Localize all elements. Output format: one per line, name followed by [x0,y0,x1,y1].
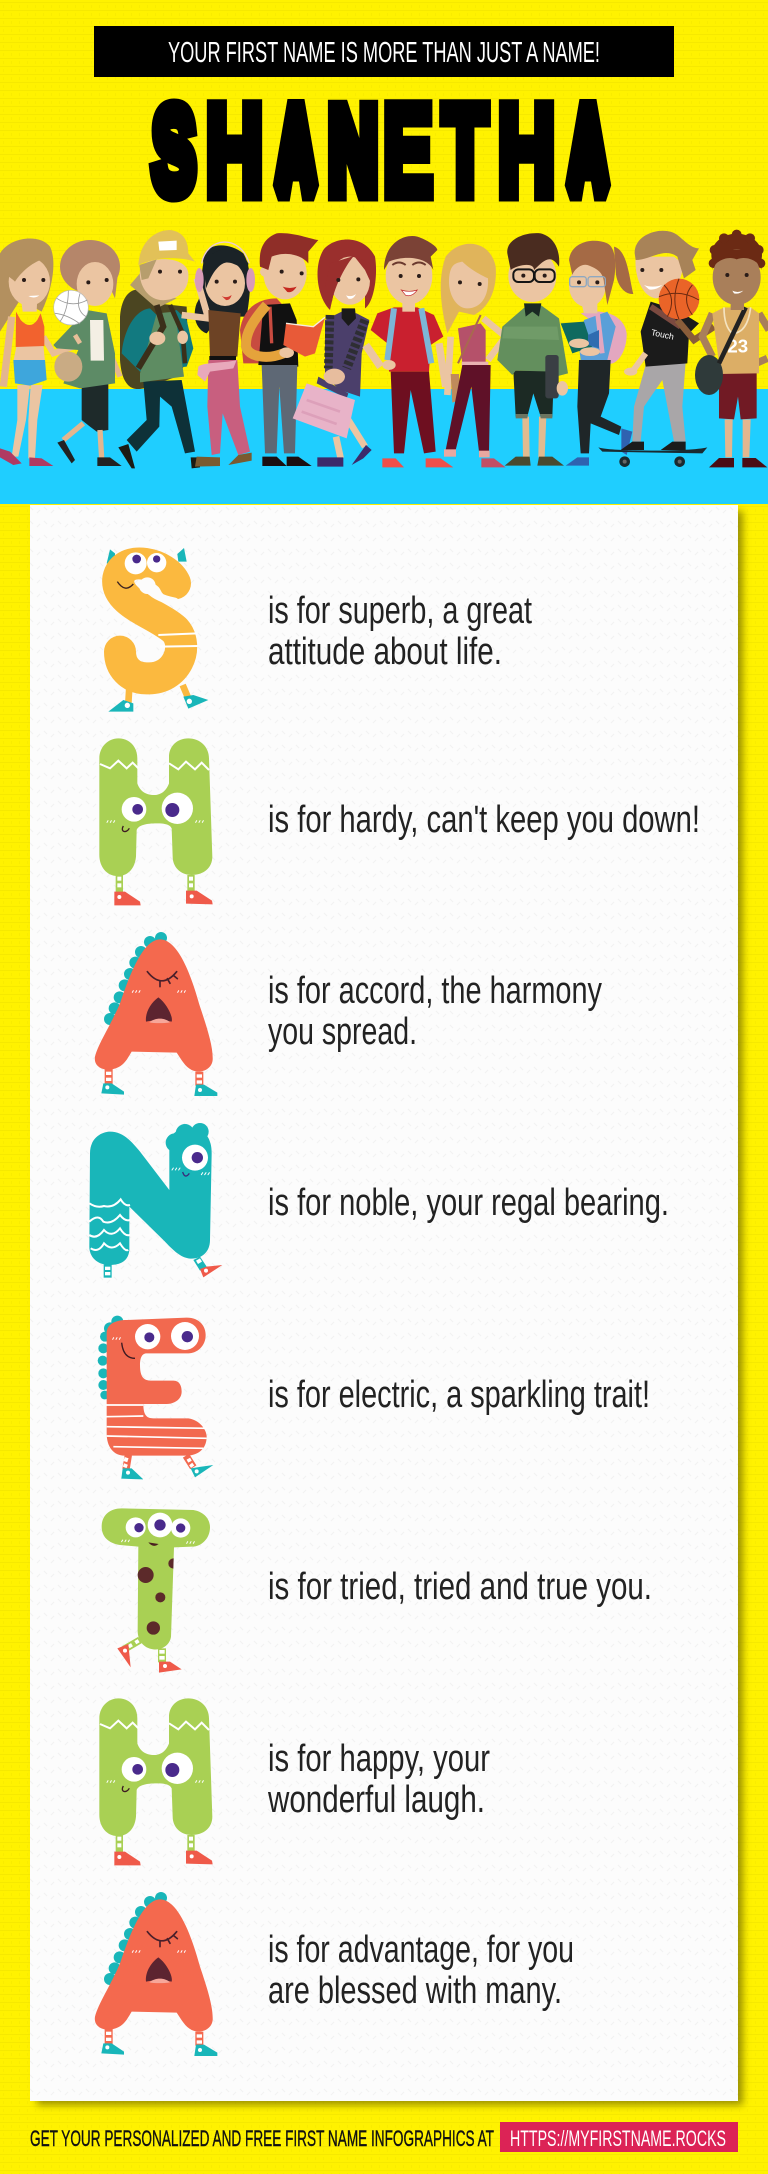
person 2: girl with volleyball [53,240,122,466]
person 11: skater with basketball [598,231,714,467]
text: S line [268,590,532,673]
text: second H line: is for happy, your [268,1738,490,1780]
letter H character (second) [99,1698,213,1865]
letter H character [99,738,213,905]
title: name: H [206,79,263,222]
text: A line [268,970,602,1053]
person 9: boy with glasses [497,233,568,466]
title: name: N [328,82,378,219]
text: second H line [267,1738,490,1821]
title: name: A [277,86,315,214]
person 1: girl in orange top [0,238,78,466]
blue ground band [0,389,768,504]
panel shadow [37,511,743,2105]
jersey number: 23 [727,336,748,357]
text: E line: is for electric, a sparkling trait! [268,1374,650,1416]
text: T line: is for tried, tried and true you. [268,1566,652,1608]
people illustration: left group [0,230,376,468]
text: second A line [268,1929,574,2012]
title: name: E [383,80,433,223]
person 7: boy in red tee [366,236,453,467]
people illustration: right group [366,230,768,467]
text: second A line: is for advantage, for you [268,1929,574,1971]
person 5: boy with book [240,233,325,466]
text: S line: attitude about life. [268,631,502,673]
title: name: T [442,80,488,223]
title: name: A [569,86,607,214]
title: name: H [498,79,555,222]
text: A line: is for accord, the harmony [268,970,602,1012]
person 12: boy in yellow tank [695,230,768,467]
basketball [659,279,699,319]
person 4: girl with headphones [182,242,255,467]
letter N character [89,1123,222,1278]
letter A character [95,932,217,1096]
footer [30,2122,738,2152]
person 3: backpacker with cap [118,230,200,468]
title: name [152,79,607,223]
header banner [94,26,674,77]
person 10: girl with ponytail and tablet [561,241,633,466]
letter S character [107,548,208,712]
text: second H line: wonderful laugh. [267,1779,485,1821]
text: A line: you spread. [268,1011,417,1053]
letter T character [102,1508,210,1673]
letter E character [98,1316,213,1479]
footer call to action: GET YOUR PERSONALIZED AND FREE FIRST NAME INFOGRAPHICS AT [30,2126,494,2151]
person 6: red-haired girl with pink case [293,240,376,467]
tee print: Touch [650,327,675,342]
text: second A line: are blessed with many. [268,1970,562,2012]
title: name: S [152,83,196,219]
person 8: blonde girl [441,244,506,467]
white content panel [30,505,738,2101]
letter A character (second) [95,1892,217,2056]
text: S line: is for superb, a great [268,590,532,632]
